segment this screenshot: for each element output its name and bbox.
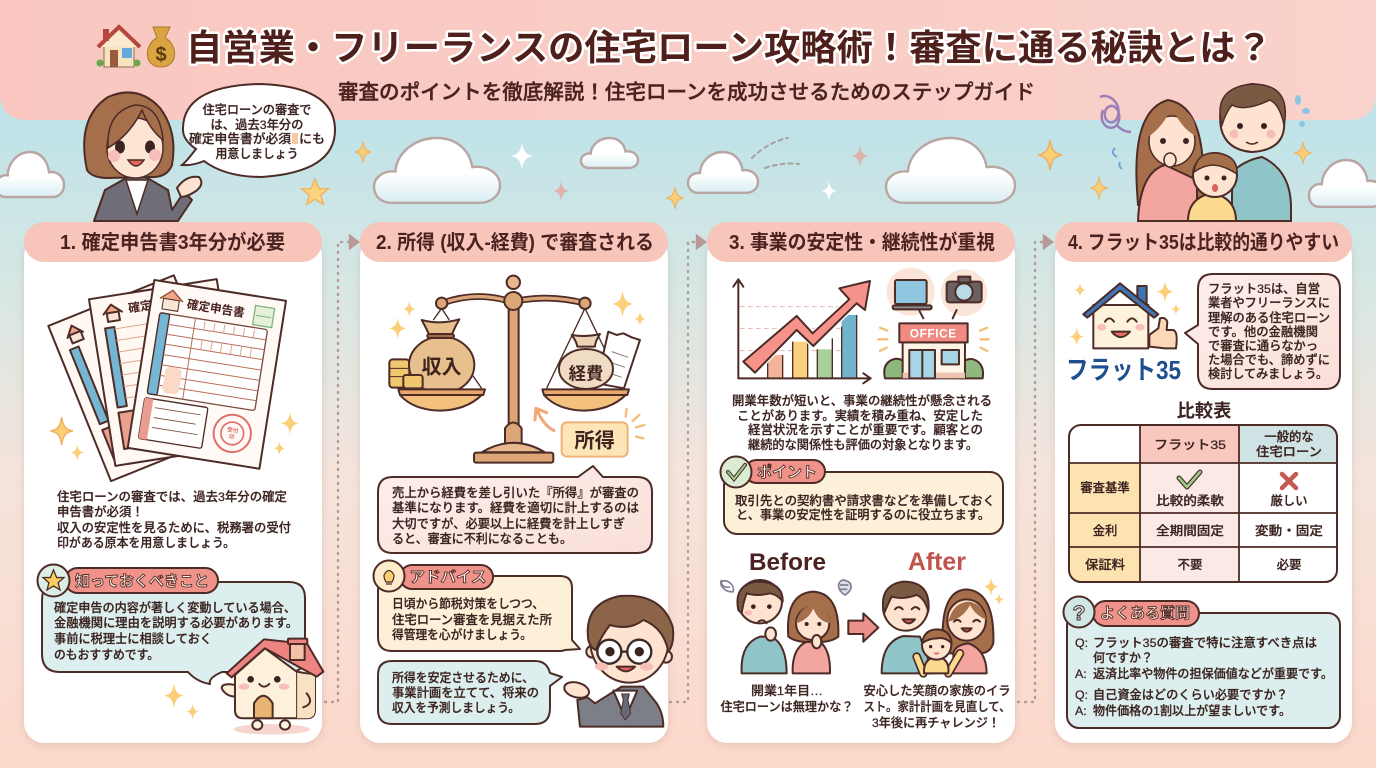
illustration: balance scale xyxy=(389,276,646,463)
heading pill: step 2 xyxy=(360,222,668,262)
speech bubble: Flat 35 explanation: フラット35は、自営 xyxy=(1208,281,1320,296)
speech bubble: woman xyxy=(182,84,335,177)
callout: point xyxy=(720,456,1003,534)
comparison table: 必要 xyxy=(1277,558,1301,572)
comparison table: 不要 xyxy=(1178,558,1202,572)
callout: things to know: 金融機関に理由を説明する必要があります。 xyxy=(54,615,298,630)
callout: FAQ: フラット35の審査で特に注意すべき点は xyxy=(1093,635,1317,650)
callout: FAQ: ? xyxy=(1073,602,1085,625)
header band xyxy=(0,0,1376,120)
text block: step 1 body: 印がある原本を用意しましょう。 xyxy=(57,535,235,550)
comparison table xyxy=(1069,425,1337,582)
speech bubble: stabilise income: 事業計画を立てて、将来の xyxy=(392,685,539,700)
text block: step 1 body: 住宅ローンの審査では、過去3年分の確定 xyxy=(57,489,287,504)
subtitle: 審査のポイントを徹底解説！住宅ローンを成功させるためのステップガイド xyxy=(338,81,1035,104)
speech bubble: income explanation: ると、審査に不利になることも。 xyxy=(392,532,572,546)
icon: house emoji xyxy=(96,27,140,67)
callout: advice: アドバイス xyxy=(410,569,486,586)
speech bubble: stabilise income xyxy=(378,661,562,724)
speech bubble: income explanation: 売上から経費を差し引いた『所得』が審査の xyxy=(392,485,639,500)
bag: income xyxy=(389,319,474,393)
illustration: office with laptop and camera xyxy=(878,268,989,378)
comparison table: 保証料 xyxy=(1085,557,1126,572)
sparkles and stars in sky xyxy=(302,138,1312,209)
heading pill: step 2: 2. 所得 (収入-経費) で審査される xyxy=(376,231,654,254)
label: income xyxy=(562,422,628,457)
text block: step 3 body: 継続的な関係性も評価の対象となります。 xyxy=(748,437,978,452)
illustration: tax return documents: 確定 xyxy=(127,297,153,316)
callout: FAQ: Q: xyxy=(1075,636,1088,650)
card background xyxy=(707,236,1015,743)
card background xyxy=(360,236,668,743)
caption: before xyxy=(720,683,854,714)
speech bubble: stabilise income: 所得を安定させるために、 xyxy=(392,670,534,685)
character: worried family xyxy=(1100,84,1310,221)
icon: money bag emoji: $ xyxy=(155,44,167,66)
speech bubble: woman: は、過去3年分の xyxy=(210,117,304,132)
speech bubble: woman: にも xyxy=(299,132,325,146)
speech bubble: income explanation xyxy=(378,466,652,553)
comparison table: 比較的柔軟 xyxy=(1156,493,1225,508)
speech bubble: income explanation: 大切ですが、必要以上に経費を計上しすぎ xyxy=(392,516,625,531)
speech bubble: Flat 35 explanation: 業者やフリーランスに xyxy=(1208,295,1330,310)
callout: things to know xyxy=(38,564,305,684)
speech bubble: stabilise income: 収入を予測しましょう。 xyxy=(392,700,520,715)
caption: after: 安心した笑顔の家族のイラ xyxy=(864,683,1010,698)
caption: after xyxy=(864,683,1010,730)
callout: FAQ: Q: xyxy=(1075,688,1088,702)
speech bubble: income explanation: 基準になります。経費を適切に計上するのは xyxy=(392,500,639,515)
callout: FAQ: 物件価格の1割以上が望ましいです。 xyxy=(1093,703,1291,718)
text block: step 1 body: 申告書が必須！ xyxy=(57,504,144,519)
illustration: tax return documents: 確定申告書 xyxy=(186,296,246,320)
callout: FAQ: A: xyxy=(1075,667,1087,681)
callout: advice: 得管理を心がけましょう。 xyxy=(392,627,532,642)
label: income: 所得 xyxy=(574,429,615,452)
dotted connectors between cards xyxy=(325,236,1052,702)
callout: things to know: 確定申告の内容が著しく変動している場合、 xyxy=(54,600,296,615)
callout: FAQ: 自己資金はどのくらい必要ですか？ xyxy=(1093,687,1288,702)
panel: step 2 xyxy=(360,222,673,743)
speech bubble: woman: 住宅ローンの審査で xyxy=(202,102,312,117)
mascot: house character xyxy=(164,639,323,735)
heading: before: Before xyxy=(749,549,826,576)
clouds xyxy=(0,138,1376,207)
callout: point: と、事業の安定性を証明するのに役立ちます。 xyxy=(736,507,990,522)
comparison table: 変動・固定 xyxy=(1255,523,1323,538)
icon: check xyxy=(1179,472,1200,487)
text block: step 1 body xyxy=(57,489,291,550)
speech bubble: woman: 用意しましょう xyxy=(216,147,298,161)
card background xyxy=(1055,236,1352,743)
heading pill: step 4: 4. フラット35は比較的通りやすい xyxy=(1068,231,1339,254)
title: 自営業・フリーランスの住宅ローン攻略術！審査に通る秘訣とは？ xyxy=(186,27,1272,68)
comparison table: 金利 xyxy=(1093,523,1117,538)
callout: FAQ xyxy=(1064,596,1340,728)
illustration: tax return documents: 受付 xyxy=(227,425,239,435)
callout: things to know: 事前に税理士に相談しておく xyxy=(54,631,212,646)
heading pill: step 1: 1. 確定申告書3年分が必要 xyxy=(60,230,285,254)
comparison table: フラット35 xyxy=(1154,438,1226,452)
illustration: office with laptop and camera: OFFICE xyxy=(910,327,957,340)
character: advisor man xyxy=(563,596,673,727)
callout: advice: 日頃から節税対策をしつつ、 xyxy=(392,596,544,611)
speech bubble: Flat 35 explanation: です。他の金融機関 xyxy=(1208,324,1318,339)
speech bubble: Flat 35 explanation: た場合でも、諦めずに xyxy=(1208,352,1330,367)
speech bubble: woman: 確定申告書が必須 xyxy=(189,131,292,146)
logo text: Flat 35: フラット35 xyxy=(1066,355,1181,385)
heading: comparison table: 比較表 xyxy=(1177,400,1231,421)
text block: step 3 body: 開業年数が短いと、事業の継続性が懸念される xyxy=(732,393,992,408)
caption: after: 3年後に再チャレンジ！ xyxy=(872,715,1000,730)
caption: before: 開業1年目… xyxy=(751,683,823,698)
speech bubble: Flat 35 explanation: 理解のある住宅ローン xyxy=(1208,310,1330,325)
callout: advice: 住宅ローン審査を見据えた所 xyxy=(392,612,552,627)
speech bubble: Flat 35 explanation: で審査に通らなかっ xyxy=(1208,338,1318,353)
logo: smiling house Flat 35 xyxy=(1069,281,1181,348)
callout: advice xyxy=(374,560,580,651)
caption: after: スト。家計計画を見直して、 xyxy=(864,699,1010,714)
comparison table: 厳しい xyxy=(1270,493,1308,508)
speech bubble: Flat 35 explanation xyxy=(1185,274,1340,389)
callout: FAQ: 返済比率や物件の担保価値などが重要です。 xyxy=(1093,666,1333,681)
text block: step 3 body: ことがあります。実績を積み重ね、安定した xyxy=(737,408,983,423)
caption: before: 住宅ローンは無理かな？ xyxy=(720,699,854,714)
panel: step 1 xyxy=(24,222,323,743)
bag: expenses: 経費 xyxy=(569,363,603,383)
card background xyxy=(24,236,322,743)
callout: FAQ: よくある質問 xyxy=(1100,605,1190,622)
comparison table: 全期間固定 xyxy=(1156,523,1224,538)
callout: things to know: 知っておくべきこと xyxy=(75,572,209,590)
heading pill: step 1 xyxy=(24,222,322,262)
bag: income: 収入 xyxy=(422,355,462,378)
bag: expenses xyxy=(559,332,640,389)
panel: step 3 xyxy=(707,222,1015,743)
illustration: tax return documents: 印 xyxy=(228,432,236,441)
illustration: tax return documents xyxy=(48,275,299,481)
panel: step 4 xyxy=(1055,222,1352,743)
illustration: happy family xyxy=(882,577,1004,673)
text block: step 1 body: 収入の安定性を見るために、税務署の受付 xyxy=(57,520,291,535)
callout: things to know: のもおすすめです。 xyxy=(54,648,159,662)
comparison table: 審査基準 xyxy=(1080,480,1130,495)
icon: money bag emoji xyxy=(147,27,175,67)
heading pill: step 3: 3. 事業の安定性・継続性が重視 xyxy=(729,230,995,254)
callout: point: ポイント xyxy=(757,464,817,481)
growth chart xyxy=(733,279,871,383)
heading: after: After xyxy=(908,549,966,576)
arrow: before to after xyxy=(848,613,878,642)
comparison table: 一般的な xyxy=(1264,429,1314,444)
speech bubble: Flat 35 explanation: 検討してみましょう。 xyxy=(1208,366,1328,381)
heading pill: step 4 xyxy=(1055,222,1352,262)
text block: step 3 body: 経営状況を示すことが重要です。顧客との xyxy=(748,422,983,437)
illustration: worried couple xyxy=(721,580,851,673)
callout: point: 取引先との契約書や請求書などを準備しておく xyxy=(735,493,995,508)
text block: step 3 body xyxy=(732,393,992,452)
heading pill: step 3 xyxy=(707,222,1015,262)
callout: FAQ: A: xyxy=(1075,704,1087,718)
callout: FAQ: 何ですか？ xyxy=(1093,650,1153,665)
comparison table: 住宅ローン xyxy=(1256,444,1322,459)
icon: cross xyxy=(1282,474,1296,488)
character: businesswoman xyxy=(84,92,201,221)
